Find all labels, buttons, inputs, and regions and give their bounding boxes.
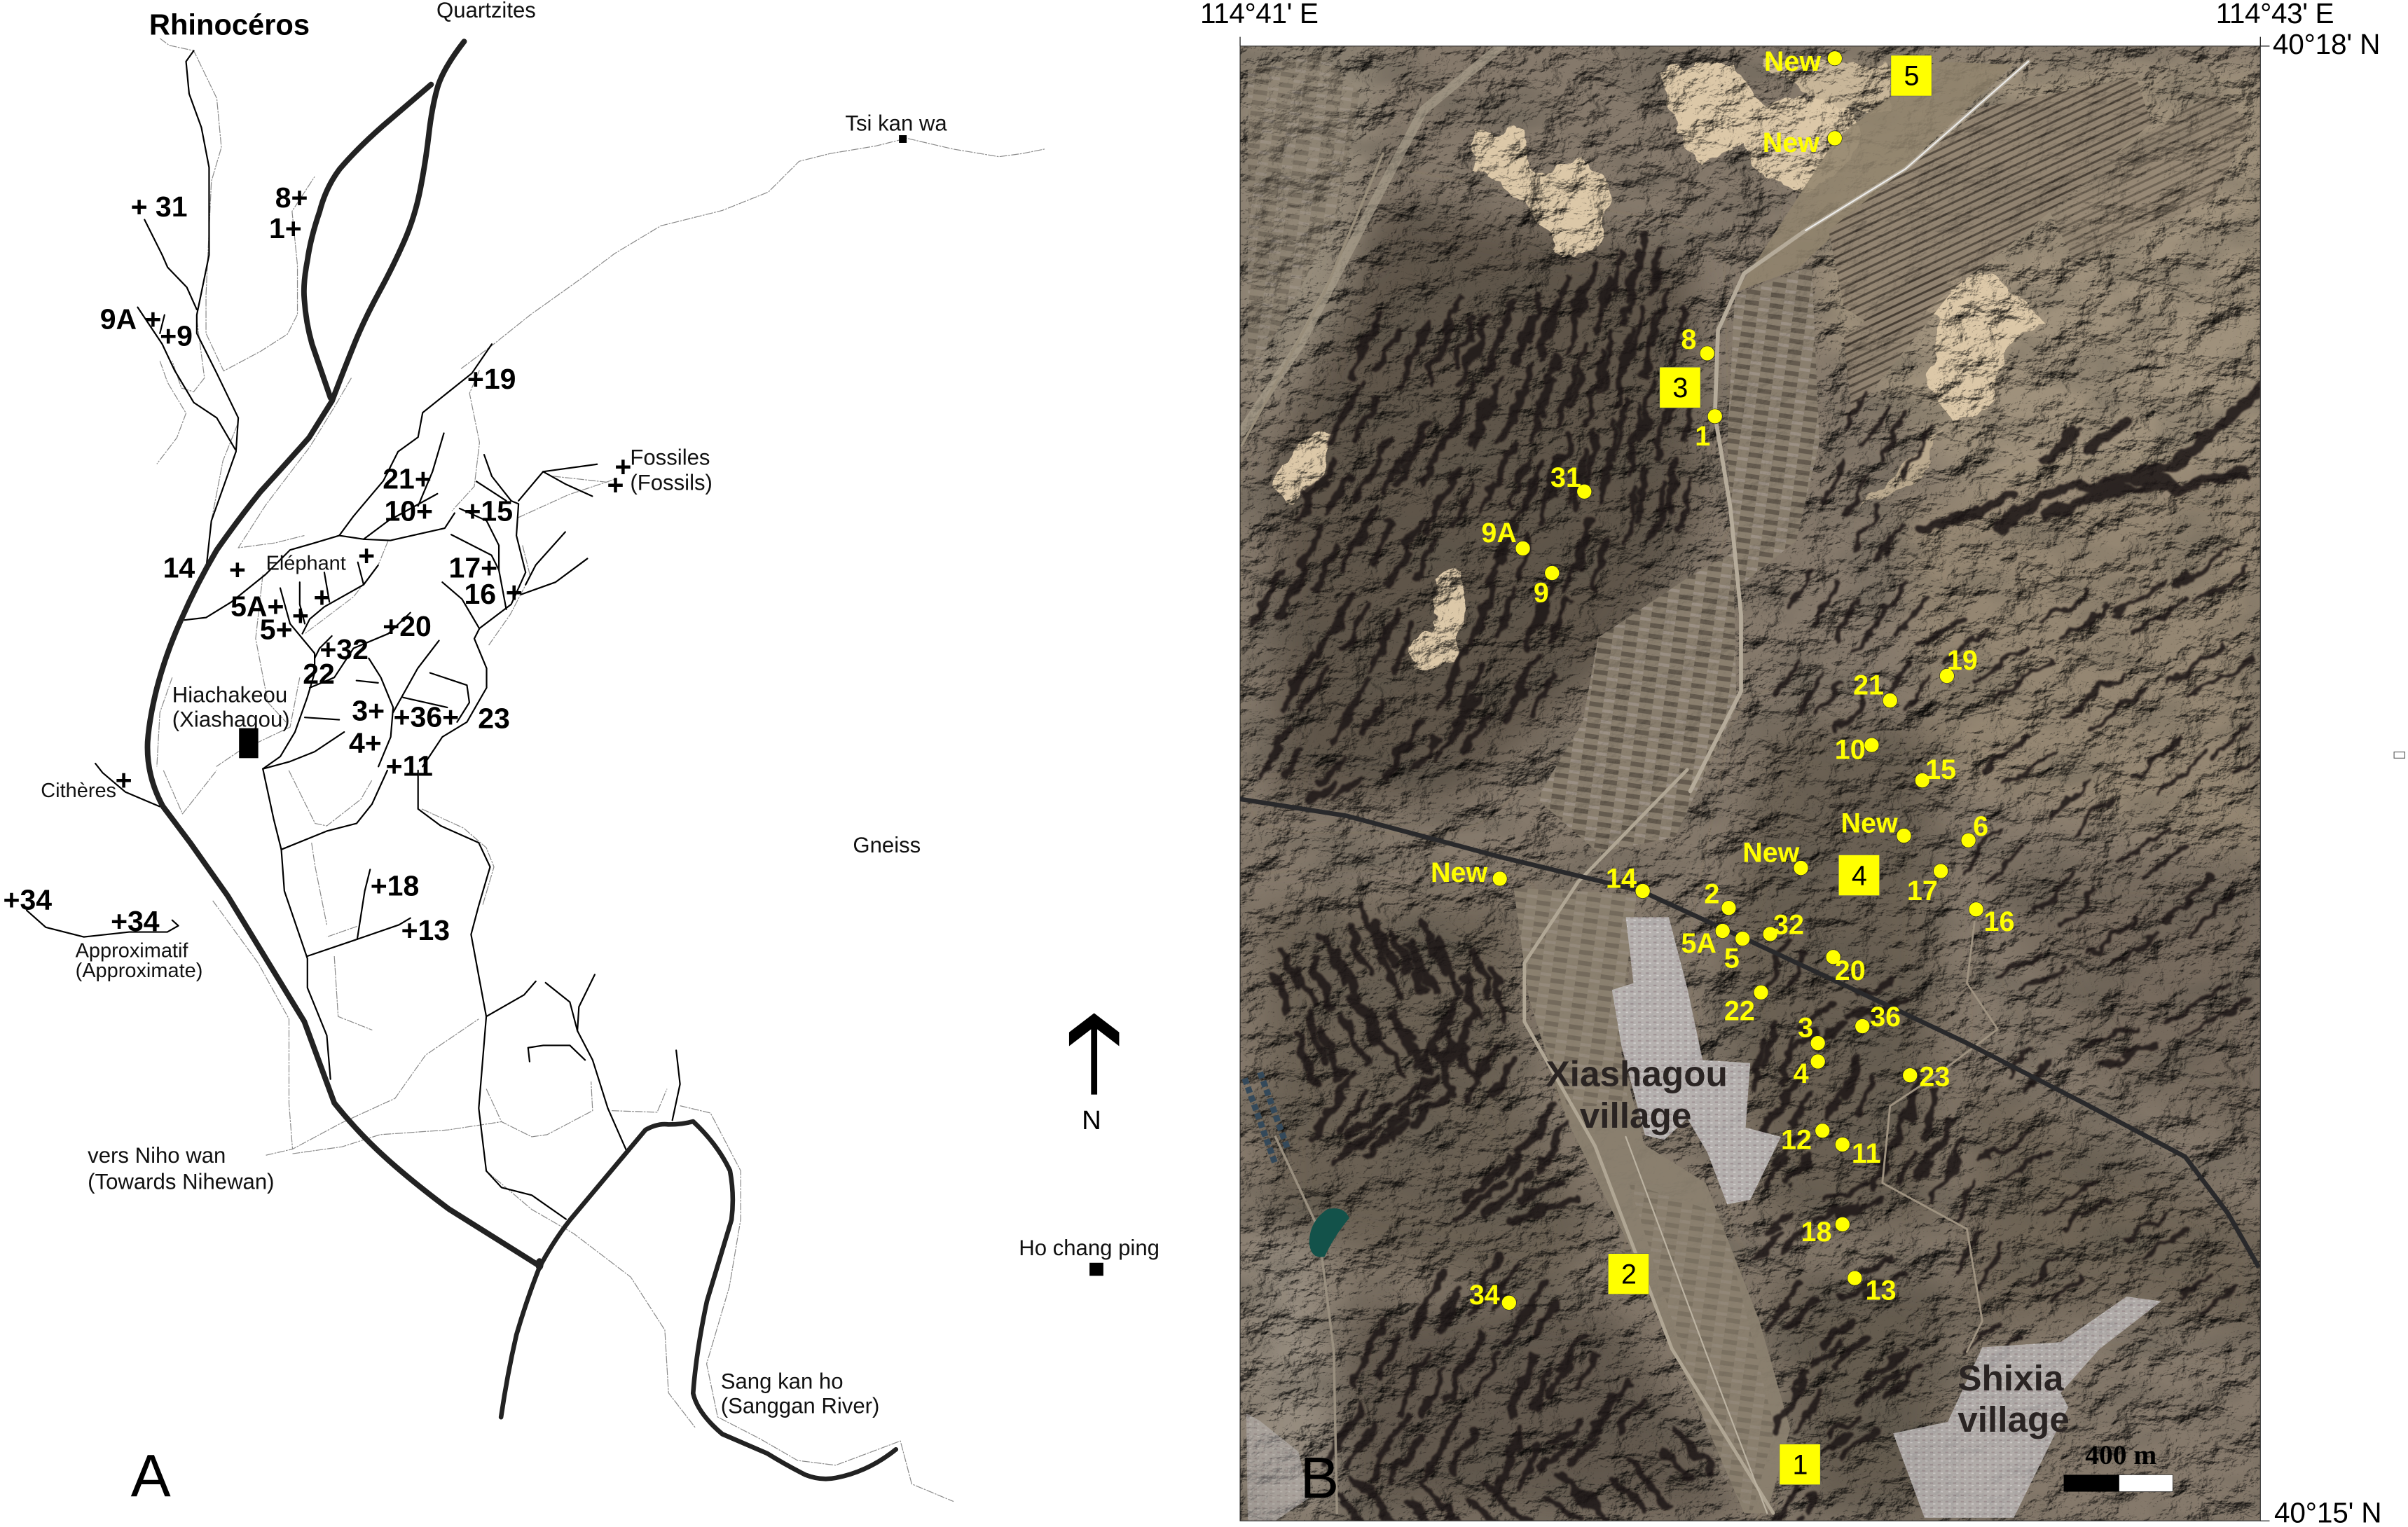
- site labels: central group: +: [314, 581, 331, 613]
- site 5: [1724, 931, 1750, 974]
- site labels: central group: 22: [303, 658, 335, 690]
- New west: New: [1431, 857, 1487, 888]
- site labels: +34 and Approximatif: +34: [111, 905, 160, 937]
- site 20: 20: [1835, 955, 1866, 986]
- site 10: [1835, 734, 1879, 765]
- terrain tone patches: [1245, 46, 2274, 1513]
- site labels: central group: +11: [386, 750, 433, 782]
- site 20: [1826, 950, 1866, 986]
- site labels: central group: +20: [383, 610, 432, 642]
- scale bar 400 m: 400 m: [2085, 1439, 2156, 1470]
- New north 2: New: [1763, 127, 1819, 158]
- site labels: central group: +32: [319, 633, 369, 665]
- site labels: central group: +: [229, 553, 246, 586]
- label: Fossiles (Fossils): +: [614, 450, 631, 483]
- site 6: [1961, 811, 1988, 848]
- label: Shixia village: village: [1958, 1400, 2070, 1439]
- label: Xiashagou village: Xiashagou: [1546, 1054, 1728, 1094]
- label: Cithères: [41, 764, 132, 802]
- site labels: northern group: +19: [467, 363, 516, 395]
- site 3: [1798, 1012, 1825, 1051]
- label: Shixia village: Shixia: [1958, 1358, 2064, 1398]
- site 5: 5: [1724, 944, 1740, 974]
- site 17: [1907, 864, 1948, 906]
- site 11: 11: [1852, 1138, 1881, 1169]
- site labels: northern group: 10+: [384, 495, 433, 527]
- site labels: northern group: 8+: [275, 181, 308, 214]
- site 6: 6: [1973, 811, 1988, 842]
- site 34: [1469, 1280, 1516, 1311]
- label: towards Nihewan: [88, 1143, 275, 1194]
- site 19: 19: [1947, 645, 1978, 676]
- site labels: +18 and +13: +18: [371, 870, 419, 902]
- site labels: northern group: [100, 181, 516, 527]
- site 23: 23: [1919, 1062, 1950, 1093]
- site 17: 17: [1907, 876, 1938, 906]
- label: Fossiles (Fossils): Fossiles: [630, 445, 710, 469]
- site labels: northern group: +15: [464, 495, 513, 527]
- label: Cithères: Cithères: [41, 780, 116, 802]
- label: towards Nihewan: (Towards Nihewan): [88, 1170, 275, 1194]
- coordinate labels: [1200, 0, 2382, 1527]
- site 10: 10: [1835, 734, 1866, 765]
- site labels: +34 and Approximatif: (Approximate): [76, 960, 202, 982]
- site 32: 32: [1773, 909, 1804, 940]
- heading: Rhinocéros: Rhinocéros: [149, 8, 310, 41]
- site 18: 18: [1801, 1217, 1831, 1248]
- satellite image: [1239, 46, 2274, 1527]
- label and marker: Ho chang ping: Ho chang ping: [1019, 1236, 1160, 1260]
- site 22: 22: [1724, 995, 1755, 1026]
- label: Fossiles (Fossils): (Fossils): [630, 471, 713, 495]
- site 12: [1781, 1124, 1830, 1155]
- main roads (thick lines): [148, 41, 896, 1479]
- New east: New: [1841, 808, 1898, 839]
- site 5 box: 5: [1904, 61, 1919, 92]
- site 13: 13: [1866, 1275, 1897, 1306]
- label: Sanggan River: Sang kan ho: [721, 1369, 844, 1394]
- site 4 box: 4: [1852, 860, 1867, 891]
- label and marker: Hiachakeou (Xiashagou): (Xiashagou): [172, 707, 290, 731]
- highway: [1239, 799, 2259, 1267]
- site 13: [1848, 1271, 1897, 1306]
- site 9A: 9A: [1481, 518, 1517, 548]
- site labels: northern group: 1+: [269, 212, 302, 244]
- site labels: central group: [163, 539, 523, 782]
- secondary paths and tracks (thin grey lines): [157, 39, 1045, 1502]
- icon: north arrow: [1069, 1013, 1119, 1135]
- hillshade relief texture: [1240, 46, 2260, 1521]
- site 11: [1835, 1137, 1881, 1169]
- site 36: [1855, 1002, 1901, 1034]
- site labels: +34 and Approximatif: +34: [4, 883, 52, 915]
- site 18: [1801, 1217, 1850, 1248]
- label: Gneiss: Gneiss: [853, 833, 921, 857]
- site 31: 31: [1550, 462, 1581, 493]
- site 12: 12: [1781, 1124, 1812, 1155]
- site 1 box: 1: [1792, 1449, 1808, 1480]
- village area: Shixia: [1893, 1297, 2161, 1518]
- dark gully shadows: [1251, 230, 2273, 1527]
- site labels: northern group: +: [144, 303, 161, 335]
- site labels: central group: 3+: [352, 695, 385, 727]
- site labels: central group: 14: [163, 552, 195, 584]
- site 5A: [1681, 924, 1730, 959]
- panel B: satellite image with sites: [1200, 0, 2404, 1527]
- site 4: [1794, 1054, 1825, 1089]
- site labels: +34 and Approximatif: [4, 883, 202, 982]
- label: Xiashagou village: village: [1580, 1096, 1691, 1135]
- site labels: central group: 5+: [260, 613, 293, 645]
- label: Xiashagou village: [1546, 1054, 1728, 1135]
- site 2: 2: [1704, 879, 1719, 910]
- site labels: northern group: +9: [160, 319, 193, 352]
- site 4: 4: [1794, 1058, 1809, 1089]
- site markers and numbers (yellow): [1431, 46, 2014, 1311]
- site 9: 9: [1534, 578, 1549, 609]
- site labels: northern group: + 31: [131, 191, 188, 223]
- site 16: [1969, 902, 2014, 937]
- panel letter A: A: [131, 1443, 171, 1509]
- site 1 box: [1780, 1444, 1820, 1485]
- site 15: [1915, 754, 1956, 788]
- site labels: central group: +: [358, 539, 375, 572]
- site 36: 36: [1870, 1002, 1901, 1032]
- site labels: central group: +: [506, 576, 523, 609]
- site 22: [1724, 985, 1768, 1026]
- farmland: [1248, 54, 2251, 1513]
- small marker at right edge: [2394, 752, 2404, 758]
- site labels: central group: 5A+: [231, 590, 284, 622]
- site 5A: 5A: [1681, 928, 1716, 959]
- wadis and gullies (thin black lines): [27, 50, 680, 1219]
- site labels: central group: +36+: [394, 700, 459, 733]
- label and marker: Hiachakeou (Xiashagou): [172, 682, 290, 758]
- site 2: [1704, 879, 1736, 915]
- site 16: 16: [1984, 906, 2014, 937]
- site 3 box: [1660, 367, 1700, 408]
- site labels: +18 and +13: [371, 870, 450, 946]
- site labels: +34 and Approximatif: Approximatif: [76, 939, 188, 962]
- site 21: [1853, 670, 1897, 708]
- label: Sanggan River: (Sanggan River): [721, 1394, 879, 1418]
- label and marker: Hiachakeou (Xiashagou): Hiachakeou: [172, 682, 287, 707]
- village area: Xiashagou: [1612, 917, 1781, 1204]
- label: Sanggan River: [721, 1369, 879, 1418]
- label: Fossiles (Fossils): +: [607, 469, 624, 501]
- panel A: sketch map of sites: [4, 0, 1160, 1509]
- western settlements and farm sheds: [1245, 1072, 1309, 1521]
- label: Cithères: +: [116, 764, 132, 796]
- site 3 box: 3: [1672, 373, 1688, 403]
- site 23: [1903, 1062, 1950, 1093]
- site labels: central group: Eléphant: [266, 553, 346, 575]
- label: Fossiles (Fossils): [607, 445, 713, 501]
- site 5 box: [1891, 55, 1932, 96]
- site labels: central group: 4+: [349, 727, 382, 759]
- label: towards Nihewan: vers Niho wan: [88, 1143, 226, 1168]
- site labels: central group: 17+: [449, 552, 497, 584]
- scale bar 400 m: [2064, 1439, 2173, 1492]
- site 14: 14: [1606, 864, 1637, 894]
- site labels: central group: +: [292, 600, 309, 632]
- label: Shixia village: [1958, 1358, 2070, 1439]
- coordinate labels: 40°18' N: [2273, 28, 2380, 60]
- site 19: [1939, 645, 1978, 684]
- map frame: [1240, 46, 2260, 1521]
- quarries (pale patches): [1272, 62, 2044, 668]
- site 1: 1: [1695, 421, 1710, 452]
- axis ticks: [1240, 37, 2269, 1521]
- site labels: northern group: 21+: [383, 462, 432, 495]
- site 2 box: [1608, 1254, 1649, 1294]
- site 34: 34: [1469, 1280, 1500, 1311]
- site 8: 8: [1681, 324, 1696, 355]
- New centre: New: [1742, 837, 1800, 868]
- New north 1: New: [1764, 46, 1821, 77]
- site 1: [1695, 409, 1722, 452]
- site labels: central group: 23: [478, 703, 510, 735]
- site 9: [1534, 566, 1560, 609]
- label and marker: Ho chang ping: [1019, 1236, 1160, 1276]
- site 31: [1550, 462, 1592, 499]
- icon: north arrow: N: [1082, 1105, 1101, 1135]
- site 21: 21: [1853, 670, 1884, 700]
- site 2 box: 2: [1621, 1259, 1637, 1290]
- site 15: 15: [1925, 754, 1956, 785]
- site labels: +18 and +13: +13: [401, 914, 450, 946]
- roads: [1241, 46, 2028, 1513]
- panel letter B: B: [1300, 1445, 1339, 1510]
- reservoir: [1309, 1208, 1349, 1257]
- site labels: northern group: 9A: [100, 303, 137, 335]
- site 4 box: [1838, 855, 1880, 896]
- site 8: [1681, 324, 1714, 361]
- site 14: [1606, 864, 1650, 899]
- site labels: central group: 16: [464, 578, 496, 610]
- site 3: 3: [1798, 1012, 1813, 1043]
- site 9A: [1481, 518, 1530, 555]
- label and marker: Tsi kan wa: Tsi kan wa: [845, 111, 947, 135]
